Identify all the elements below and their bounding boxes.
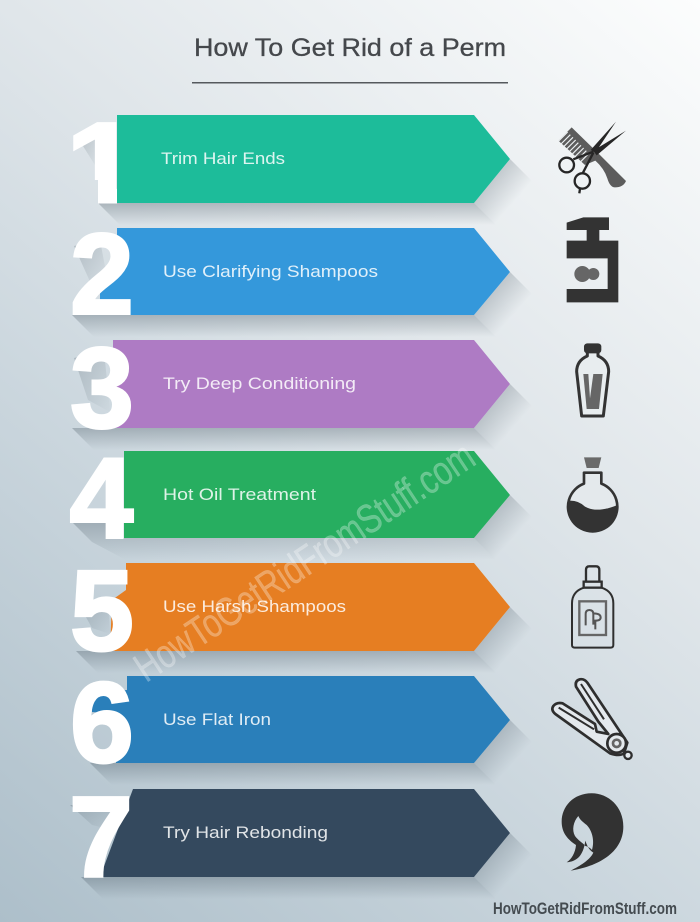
number 3: 3 (70, 325, 134, 452)
label 7: Try Hair Rebonding (163, 823, 328, 842)
label 5: Use Harsh Shampoos (163, 597, 346, 616)
arrow bar 3 (113, 340, 510, 428)
label 6: Use Flat Iron (163, 710, 271, 729)
step 6 (70, 660, 532, 787)
arrow bar 5 (110, 563, 510, 651)
icon: spray bottle (572, 566, 613, 648)
arrow bar 7 (100, 789, 510, 877)
label 3: Try Deep Conditioning (163, 374, 356, 393)
number 1: 1 (66, 100, 139, 227)
step 2 (70, 212, 532, 338)
number 2: 2 (70, 212, 134, 338)
step 5 (70, 548, 532, 675)
label 4: Hot Oil Treatment (163, 485, 316, 504)
number 4: 4 (70, 436, 133, 562)
icon: oil flask (567, 457, 617, 532)
arrow bar 6 (92, 676, 510, 763)
title rule (192, 82, 508, 84)
step 3 (70, 325, 532, 452)
arrow bar 1 (117, 115, 510, 203)
title: How To Get Rid of a Perm (194, 34, 506, 62)
icon: flat iron (552, 679, 632, 759)
number 6: 6 (70, 660, 134, 787)
icon: pump bottle (567, 217, 618, 302)
number 7: 7 (69, 774, 133, 901)
step 4 (70, 436, 532, 562)
arrow bar 2 (100, 228, 510, 315)
arrow bar 4 (124, 451, 510, 538)
label 2: Use Clarifying Shampoos (163, 262, 378, 281)
icon: hair silhouette (562, 793, 623, 871)
number 5: 5 (70, 548, 134, 675)
step 1 (73, 115, 528, 222)
label 1: Trim Hair Ends (161, 149, 285, 168)
icon: comb and scissors (558, 122, 626, 193)
icon: conditioner bottle (577, 343, 609, 416)
step 7 (69, 774, 532, 901)
watermark: HowToGetRidFromStuff.com (126, 432, 483, 691)
